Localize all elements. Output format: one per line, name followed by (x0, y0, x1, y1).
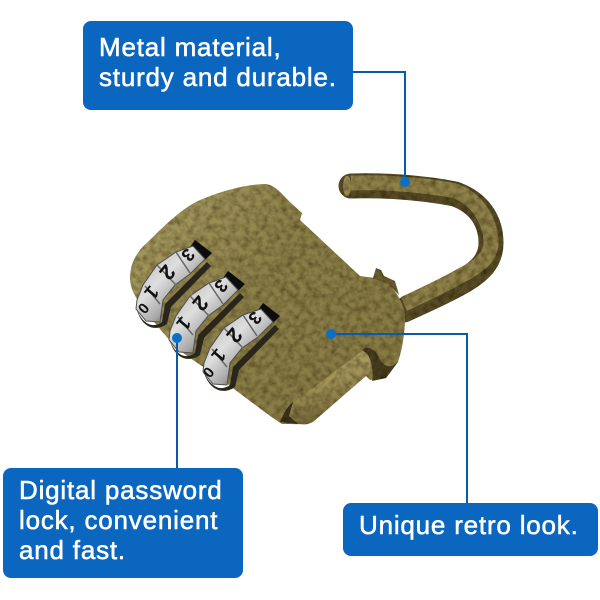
wheel 2 (169, 271, 245, 359)
icon: lock body (130, 184, 405, 424)
wheel 3: 3 (244, 308, 266, 328)
wheel 3: 0 (199, 363, 217, 381)
wheel 1: 0 (134, 299, 152, 317)
icon: open shackle (343, 176, 491, 310)
wheel 3: 2 (221, 323, 247, 347)
wheel 2: 3 (210, 276, 232, 296)
wheel 1: 1 (139, 281, 162, 303)
wheel 3 (199, 303, 280, 391)
callout: digital password lock: lock, convenient (19, 505, 218, 535)
callout: metal material: Metal material, (99, 32, 282, 62)
wheel 3: 1 (206, 344, 229, 366)
wheel 2: 1 (171, 312, 194, 334)
callout: digital password lock: Digital password (19, 475, 223, 505)
leader line: metal material (353, 72, 410, 187)
wheel 1: 3 (177, 245, 199, 265)
callout: unique retro look (343, 503, 598, 556)
leader line: digital password (172, 333, 182, 468)
callout: metal material (83, 21, 353, 110)
callout: digital password lock (3, 468, 243, 578)
callout: metal material: sturdy and durable. (99, 62, 337, 92)
callout: digital password lock: and fast. (19, 535, 126, 565)
leader line: retro look (326, 329, 467, 503)
wheel 1: 2 (154, 260, 180, 284)
wheel 2: 2 (187, 291, 213, 315)
callout: unique retro look: Unique retro look. (359, 510, 579, 540)
wheel 1 (134, 240, 212, 328)
